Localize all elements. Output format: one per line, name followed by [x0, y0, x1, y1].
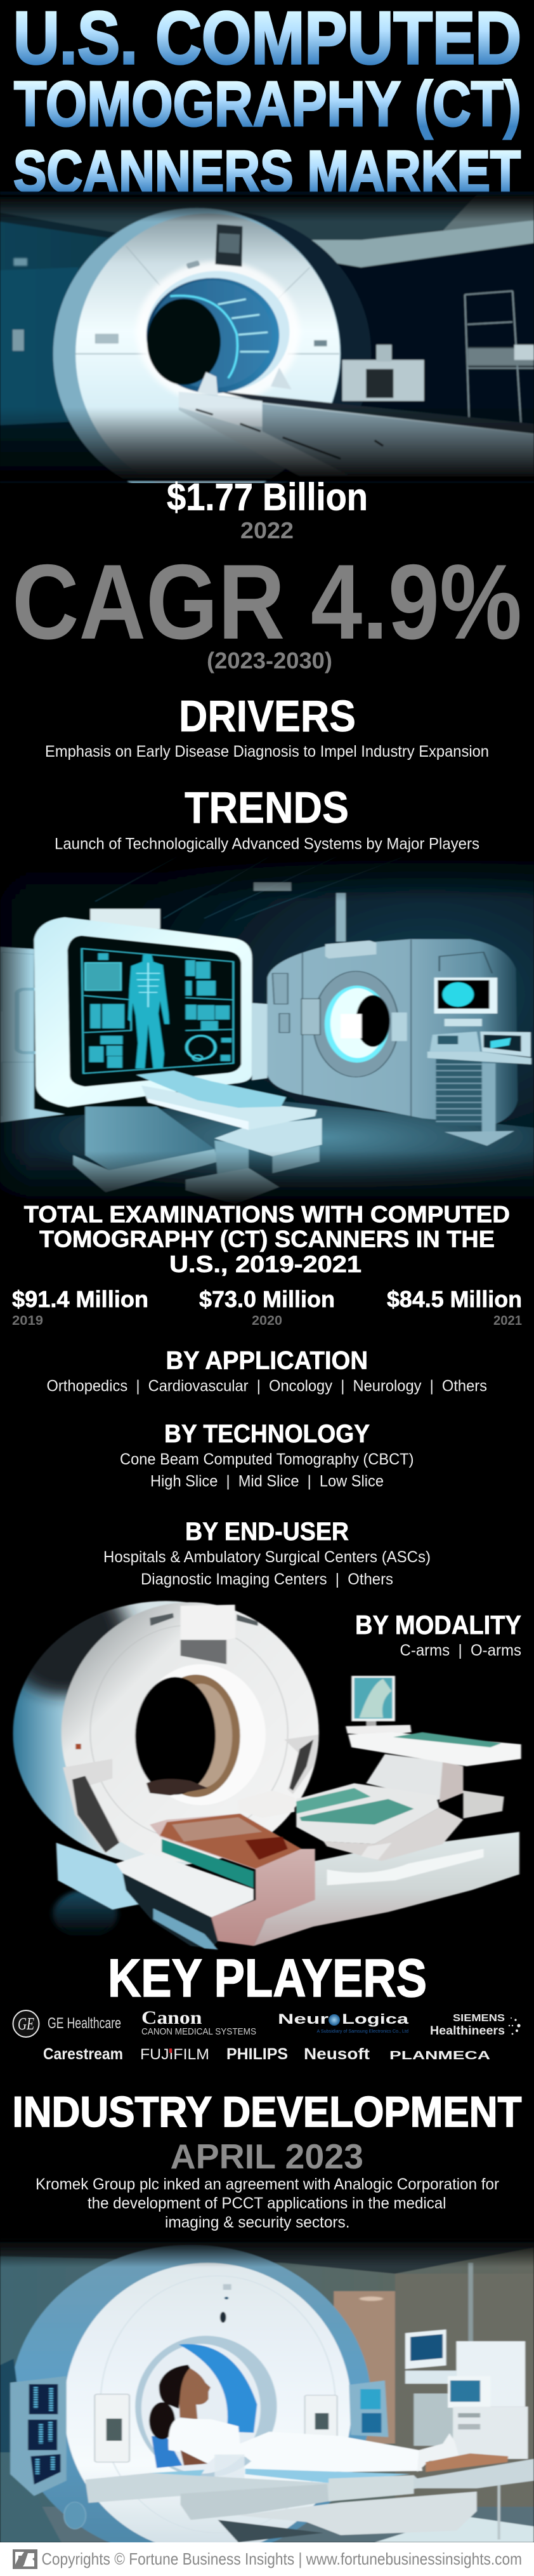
- market size value: 2022: [240, 517, 294, 543]
- image: patient in CT scanner: [0, 2239, 534, 2559]
- drivers: Emphasis on Early Disease Diagnosis to Impel Industry Expansion: [45, 743, 489, 760]
- logo: Philips: PHILIPS: [226, 2045, 288, 2063]
- CAGR stat: (2023-2030): [207, 647, 332, 674]
- monitor body scan figure: [128, 954, 169, 1068]
- logo: GE Healthcare: [13, 2010, 121, 2037]
- logo: GE Healthcare: GE: [18, 2014, 34, 2033]
- logo: NeuroLogica: [278, 2011, 409, 2034]
- market size value: $1.77 Billion: [167, 476, 368, 519]
- stat: 2021: 2021: [493, 1313, 522, 1328]
- image: white CT scanner machine with table: [0, 1579, 521, 1949]
- image: CT scanner room with glowing bore: [0, 191, 534, 500]
- stat: 2019: [12, 1286, 148, 1328]
- patient: [149, 2365, 460, 2472]
- heading: total examinations: TOMOGRAPHY (CT) SCANNERS IN THE: [39, 1226, 495, 1252]
- logo: Planmeca: PLANMECA: [389, 2049, 490, 2062]
- logo: NeuroLogica: A Subsidiary of Samsung Electronics Co., Ltd: [317, 2028, 408, 2034]
- logo: GE Healthcare: GE Healthcare: [48, 2015, 121, 2032]
- logo: Carestream: Carestream: [43, 2045, 123, 2063]
- segment: by modality: BY MODALITY: [355, 1610, 521, 1640]
- image: scanner with large body display monitor: [0, 853, 534, 1206]
- drivers: DRIVERS: [179, 691, 356, 741]
- icon: Fortune Business Insights logo: [13, 2549, 37, 2569]
- heading: total examinations: U.S., 2019-2021: [169, 1251, 361, 1277]
- stat: 2021: [387, 1286, 522, 1328]
- segment: by end-user: [103, 1518, 431, 1588]
- segment: by modality: [355, 1610, 521, 1659]
- heading: key players: KEY PLAYERS: [108, 1948, 427, 2008]
- segment: by end-user: Hospitals & Ambulatory Surgical Centers (ASCs): [103, 1548, 431, 1566]
- segment: by application: BY APPLICATION: [166, 1347, 368, 1375]
- development description: [36, 2175, 499, 2231]
- stat: 2020: $73.0 Million: [199, 1286, 335, 1312]
- stat: 2020: [199, 1286, 335, 1328]
- logo: Siemens Healthineers: SIEMENS: [453, 2013, 505, 2024]
- stat: 2019: $91.4 Million: [12, 1286, 148, 1312]
- segment: by application: [47, 1347, 487, 1395]
- stat: 2021: $84.5 Million: [387, 1286, 522, 1312]
- logo: Canon Medical Systems: [141, 2007, 256, 2037]
- segment: by technology: Cone Beam Computed Tomography (CBCT): [120, 1451, 414, 1468]
- stat: 2019: 2019: [12, 1313, 43, 1328]
- trends: TRENDS: [185, 783, 349, 832]
- development description: the development of PCCT applications in the medical: [88, 2194, 446, 2212]
- logo: Siemens Healthineers: Healthineers: [430, 2024, 505, 2038]
- drivers: [45, 691, 489, 760]
- market size value: [167, 476, 368, 543]
- segment: by technology: High Slice | Mid Slice | Low Slice: [150, 1473, 384, 1490]
- logo: NeuroLogica: Logica: [342, 2011, 409, 2027]
- heading: total examinations: [24, 1201, 510, 1277]
- logo: Fujifilm: FUJIFILM: [140, 2046, 209, 2063]
- development description: imaging & security sectors.: [165, 2214, 350, 2231]
- segment: by application: Orthopedics | Cardiovascular | Oncology | Neurology | Others: [47, 1378, 487, 1395]
- development description: Kromek Group plc inked an agreement with Analogic Corporation for: [36, 2175, 499, 2193]
- title: [13, 0, 521, 204]
- logo: Canon Medical Systems: CANON MEDICAL SYSTEMS: [141, 2026, 256, 2037]
- segment: by end-user: Diagnostic Imaging Centers | Others: [141, 1570, 393, 1588]
- logo: Siemens Healthineers: [430, 2013, 521, 2038]
- trends: [55, 783, 479, 853]
- logo: Neusoft: Neusoft: [304, 2045, 370, 2063]
- segment: by end-user: BY END-USER: [185, 1518, 349, 1546]
- logo: NeuroLogica: Neur: [278, 2011, 329, 2027]
- segment: by technology: [120, 1420, 414, 1490]
- segment: by modality: C-arms | O-arms: [400, 1642, 521, 1659]
- date: April 2023: APRIL 2023: [170, 2137, 363, 2176]
- segment: by technology: BY TECHNOLOGY: [164, 1420, 370, 1448]
- footer: [0, 2542, 534, 2576]
- trends: Launch of Technologically Advanced Systems by Major Players: [55, 835, 479, 853]
- logo: Canon Medical Systems: Canon: [141, 2007, 202, 2028]
- heading: total examinations: TOTAL EXAMINATIONS WITH COMPUTED: [24, 1201, 510, 1228]
- stat: 2020: 2020: [252, 1313, 282, 1328]
